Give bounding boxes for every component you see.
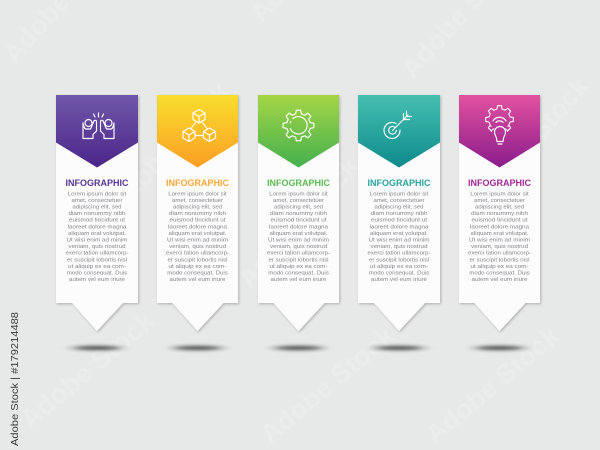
- body text 4: laoreet dolore magna: [370, 224, 430, 230]
- body text 5: veniam, quis nostrud: [471, 244, 528, 250]
- watermark: Adobe Stock: [232, 151, 366, 294]
- body text 5: aliquam erat volutpat.: [470, 231, 529, 237]
- floor shadow 2: [174, 346, 222, 350]
- body text 4: amet, consectetuer: [374, 198, 425, 204]
- body text 4: er suscipit lobortis nisl: [369, 257, 429, 263]
- body text 1: laoreet dolore magna: [68, 224, 128, 230]
- body text 1: adipiscing elit, sed: [72, 204, 122, 210]
- body text 2: autem vel eum iriure: [170, 277, 226, 283]
- body text 3: diam nonummy nibh: [270, 211, 327, 217]
- body text 1: exerci tation ullamcorp-: [66, 251, 129, 257]
- watermark: Adobe Stock: [462, 71, 596, 214]
- panel 5: magenta: [459, 95, 540, 350]
- body text 5: ut aliquip ex ea com-: [470, 264, 529, 270]
- body text 5: euismod tincidunt ut: [472, 218, 528, 224]
- body text 3: veniam, quis nostrud: [270, 244, 327, 250]
- body text 1: ut aliquip ex ea com-: [68, 264, 126, 270]
- card body 5: [459, 95, 540, 331]
- floor shadow 5: [476, 346, 524, 350]
- body text 2: Lorem ipsum dolor sit: [168, 191, 227, 197]
- body text 2: laoreet dolore magna: [168, 224, 228, 230]
- header 5: [459, 95, 540, 168]
- body text 1: er suscipit lobortis nisl: [67, 257, 127, 263]
- icon: gear with light bulb: [486, 106, 513, 144]
- body text 3: Ut wisi enim ad minim: [268, 238, 329, 244]
- icon: high five: [83, 113, 114, 138]
- body text 4: Ut wisi enim ad minim: [368, 238, 430, 244]
- body text 5: laoreet dolore magna: [470, 224, 530, 230]
- body text 4: veniam, quis nostrud: [370, 244, 428, 250]
- body text 4: modo consequat. Duis: [369, 270, 430, 276]
- body text 1: veniam, quis nostrud: [68, 244, 126, 250]
- body text 3: ut aliquip ex ea com-: [270, 264, 328, 270]
- floor shadow 1: [73, 346, 121, 350]
- body text 4: exerci tation ullamcorp-: [368, 251, 431, 257]
- body text 3: modo consequat. Duis: [268, 270, 329, 276]
- watermark: Adobe Stock: [102, 76, 236, 219]
- body text 4: [368, 191, 431, 283]
- title 1: INFOGRAPHIC: [66, 178, 129, 188]
- icon: target and arrow: [384, 111, 412, 138]
- card body 1: [56, 95, 138, 331]
- body text 2: aliquam erat volutpat.: [168, 231, 227, 237]
- body text 5: er suscipit lobortis nisl: [470, 257, 530, 263]
- title 3: INFOGRAPHIC: [267, 178, 331, 188]
- header 2: [157, 95, 238, 168]
- header 1: [56, 95, 138, 168]
- side credit text: Adobe Stock | #179214488: [9, 312, 21, 446]
- body text 5: diam nonummy nibh: [471, 211, 528, 217]
- header 3: [258, 95, 339, 168]
- body text 2: Ut wisi enim ad minim: [167, 238, 228, 244]
- body text 3: adipiscing elit, sed: [274, 204, 323, 210]
- body text 2: amet, consectetuer: [172, 198, 223, 204]
- panel 4: teal: [358, 95, 440, 350]
- body text 2: diam nonummy nibh: [169, 211, 226, 217]
- body text 1: amet, consectetuer: [72, 198, 123, 204]
- body text 1: aliquam erat volutpat.: [68, 231, 127, 237]
- body text 5: autem vel eum iriure: [472, 277, 528, 283]
- body text 2: exerci tation ullamcorp-: [166, 251, 229, 257]
- card body 3: [258, 95, 339, 331]
- body text 3: [267, 191, 330, 283]
- card body 2: [157, 95, 238, 331]
- body text 5: Lorem ipsum dolor sit: [470, 191, 529, 197]
- body text 5: exerci tation ullamcorp-: [468, 251, 531, 257]
- card body 4: [358, 95, 440, 331]
- body text 2: veniam, quis nostrud: [169, 244, 226, 250]
- body text 3: Lorem ipsum dolor sit: [269, 191, 328, 197]
- body text 5: Ut wisi enim ad minim: [469, 238, 530, 244]
- watermark: Adobe Stock: [15, 305, 161, 435]
- body text 4: adipiscing elit, sed: [374, 204, 424, 210]
- body text 4: aliquam erat volutpat.: [370, 231, 429, 237]
- body text 3: er suscipit lobortis nisl: [268, 257, 328, 263]
- body text 3: aliquam erat volutpat.: [270, 231, 328, 237]
- watermark: Adobe Stock: [420, 320, 566, 450]
- body text 1: autem vel eum iriure: [69, 277, 125, 283]
- body text 2: euismod tincidunt ut: [170, 218, 226, 224]
- title 4: INFOGRAPHIC: [368, 178, 431, 188]
- body text 3: autem vel eum iriure: [270, 277, 326, 283]
- body text 2: ut aliquip ex ea com-: [168, 264, 227, 270]
- floor shadow 3: [274, 346, 322, 350]
- body text 4: diam nonummy nibh: [370, 211, 428, 217]
- body text 5: modo consequat. Duis: [469, 270, 530, 276]
- icon: gear: [283, 110, 314, 141]
- icon: three cubes: [183, 110, 216, 142]
- body text 4: Lorem ipsum dolor sit: [370, 191, 429, 197]
- body text 5: amet, consectetuer: [474, 198, 525, 204]
- body text 3: euismod tincidunt ut: [270, 218, 327, 224]
- title 2: INFOGRAPHIC: [166, 178, 230, 188]
- body text 3: exerci tation ullamcorp-: [267, 251, 330, 257]
- body text 4: autem vel eum iriure: [371, 277, 427, 283]
- header 4: [358, 95, 440, 168]
- panel 3: green: [258, 95, 339, 350]
- body text 4: ut aliquip ex ea com-: [370, 264, 428, 270]
- body text 1: diam nonummy nibh: [68, 211, 126, 217]
- body text 5: [468, 191, 531, 283]
- title 5: INFOGRAPHIC: [468, 178, 532, 188]
- panel 1: purple: [56, 95, 138, 350]
- body text 3: laoreet dolore magna: [269, 224, 329, 230]
- body text 2: er suscipit lobortis nisl: [168, 257, 228, 263]
- body text 2: [166, 191, 229, 283]
- body text 2: adipiscing elit, sed: [173, 204, 222, 210]
- body text 1: [66, 191, 129, 283]
- floor shadow 4: [375, 346, 423, 350]
- body text 1: Lorem ipsum dolor sit: [68, 191, 127, 197]
- panel 2: orange: [157, 95, 238, 350]
- watermark: Adobe Stock: [255, 320, 401, 450]
- body text 1: modo consequat. Duis: [67, 270, 128, 276]
- body text 3: amet, consectetuer: [273, 198, 324, 204]
- body text 2: modo consequat. Duis: [167, 270, 228, 276]
- body text 4: euismod tincidunt ut: [371, 218, 428, 224]
- body text 1: euismod tincidunt ut: [69, 218, 126, 224]
- body text 5: adipiscing elit, sed: [475, 204, 524, 210]
- body text 1: Ut wisi enim ad minim: [66, 238, 128, 244]
